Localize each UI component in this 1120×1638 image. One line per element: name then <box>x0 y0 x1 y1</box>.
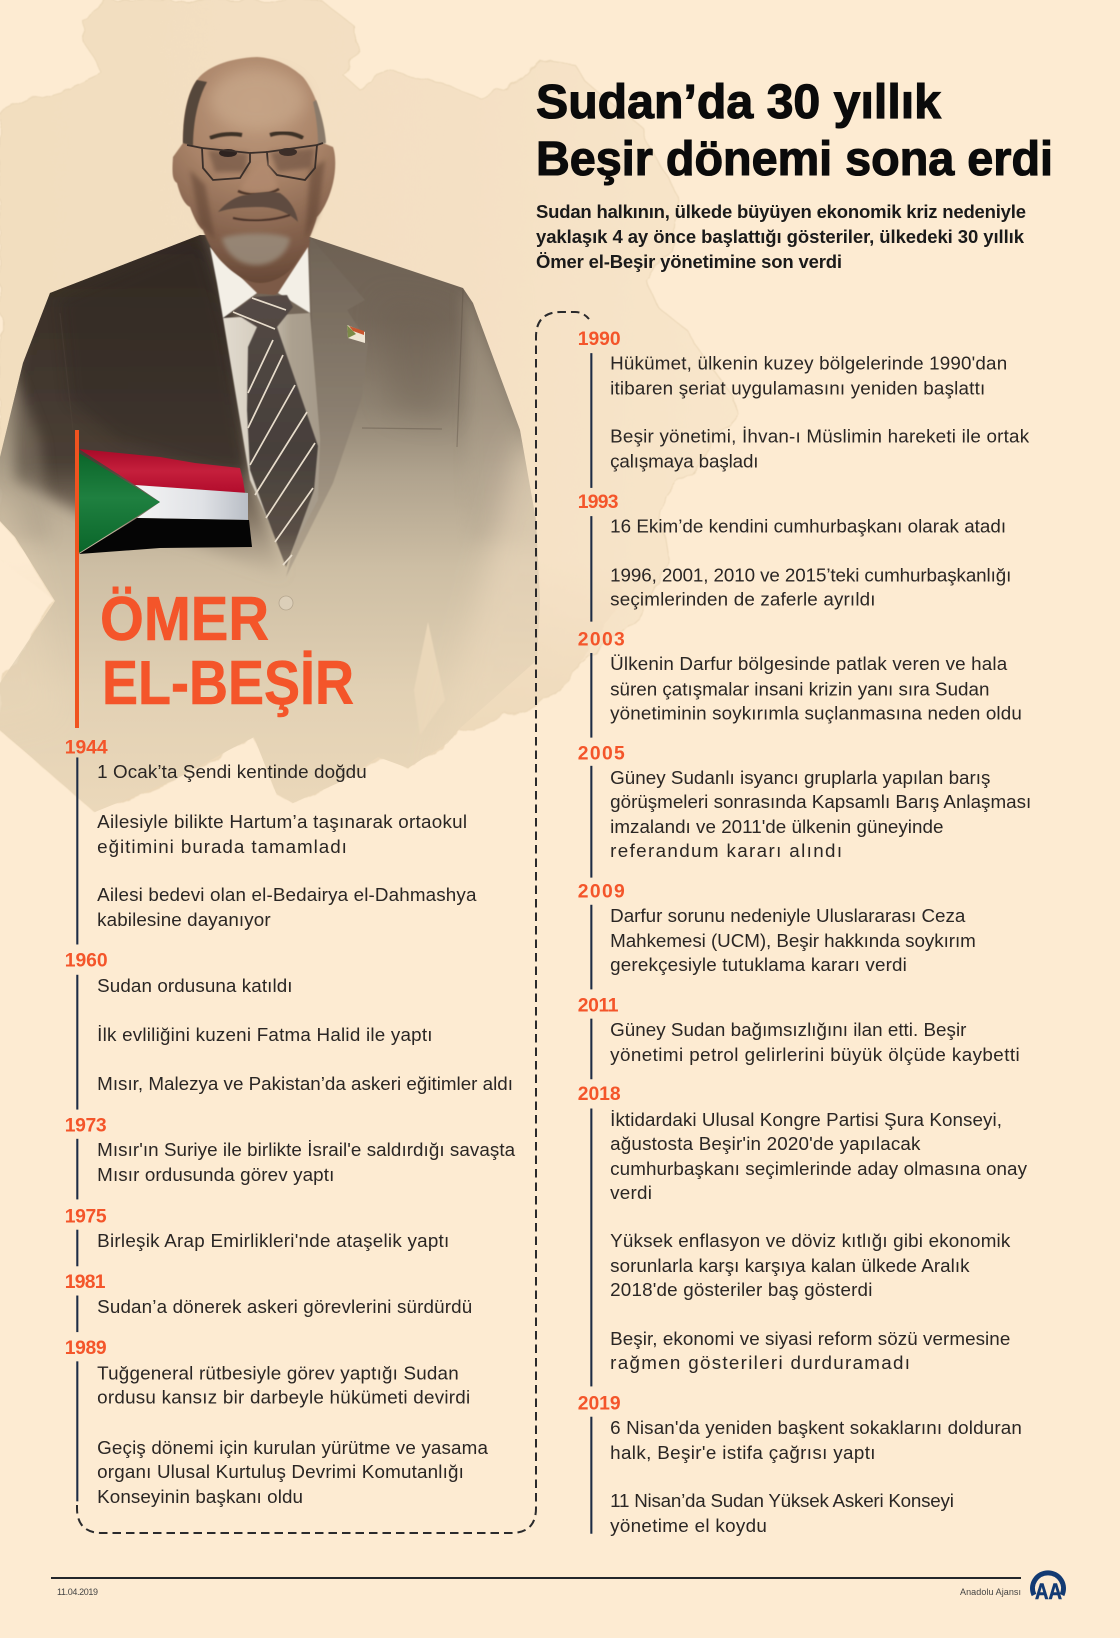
nose <box>240 160 278 193</box>
entry 1975: Birleşik Arap Emirlikleri'nde ataşelik yaptı <box>97 1230 449 1251</box>
entry 1990: Beşir yönetimi, İhvan-ı Müslimin hareketi ile ortak <box>610 425 1030 446</box>
entry 2009 <box>578 881 976 989</box>
jacket button <box>279 596 293 610</box>
entry 2018: 2018'de gösteriler baş gösterdi <box>610 1279 872 1300</box>
entry 1960 <box>65 950 513 1110</box>
entry 2005: imzalandı ve 2011'de ülkenin güneyinde <box>610 816 943 837</box>
entry 1990: çalışmaya başladı <box>610 451 759 472</box>
title: Beşir dönemi sona erdi <box>536 133 1053 186</box>
entry 2018: İktidardaki Ulusal Kongre Partisi Şura Konseyi, <box>610 1109 1002 1130</box>
entry 1989: organı Ulusal Kurtuluş Devrimi Komutanlığı <box>97 1461 464 1482</box>
head <box>172 57 335 283</box>
forehead highlight <box>210 70 306 130</box>
hair <box>183 80 207 146</box>
entry 2011 <box>578 995 1020 1079</box>
entry 1944: kabilesine dayanıyor <box>97 909 271 930</box>
entry 1973: 1973 <box>65 1115 107 1136</box>
entry 1960: İlk evliliğini kuzeni Fatma Halid ile yaptı <box>97 1024 433 1045</box>
subtitle: Ömer el-Beşir yönetimine son verdi <box>536 251 842 272</box>
entry 1990: Hükümet, ülkenin kuzey bölgelerinde 1990'dan <box>610 352 1007 373</box>
entry 2019 <box>578 1393 1022 1536</box>
lapel pin <box>347 325 365 343</box>
black stripe <box>79 518 252 554</box>
entry 1993: 16 Ekim’de kendini cumhurbaşkanı olarak atadı <box>610 515 1006 536</box>
entry 2019: yönetime el koydu <box>610 1515 767 1536</box>
entry 2011: yönetimi petrol gelirlerini büyük ölçüde kaybetti <box>610 1044 1020 1065</box>
subtitle <box>536 201 1026 272</box>
entry 1989: Tuğgeneral rütbesiyle görev yaptığı Sudan <box>97 1363 459 1384</box>
entry 2019: 2019 <box>578 1393 621 1414</box>
neck <box>210 240 310 295</box>
entry 2009: gerekçesiyle tutuklama kararı verdi <box>610 954 907 975</box>
entry 1944: 1944 <box>65 737 108 758</box>
eye sockets <box>208 148 315 172</box>
paper stain <box>0 0 737 812</box>
entry 1990: 1990 <box>578 329 621 350</box>
entry 2009: Darfur sorunu nedeniyle Uluslararası Ceza <box>610 905 966 926</box>
cheek shading <box>190 160 325 240</box>
entry 2005: görüşmeleri sonrasında Kapsamlı Barış Anlaşması <box>610 791 1031 812</box>
portrait photo <box>0 57 560 825</box>
red stripe <box>79 449 245 493</box>
jacket <box>0 215 560 825</box>
entry 1975: 1975 <box>65 1206 107 1227</box>
entry 2018: verdi <box>610 1182 652 1203</box>
left dark jacket panel <box>15 215 286 580</box>
entry 1975 <box>65 1206 449 1266</box>
entry 1990 <box>578 329 1030 488</box>
entry 1993: seçimlerinden de zaferle ayrıldı <box>610 588 876 609</box>
date: 11.04.2019 <box>57 1587 98 1597</box>
entry 1960: 1960 <box>65 950 108 971</box>
entry 2018 <box>578 1084 1028 1386</box>
white stripe <box>135 485 248 520</box>
moustache <box>218 192 298 222</box>
entry 1989: Geçiş dönemi için kurulan yürütme ve yasama <box>97 1437 488 1458</box>
name heading: EL-BEŞİR <box>102 649 354 718</box>
entry 1981: Sudan’a dönerek askeri görevlerini sürdürdü <box>97 1296 472 1317</box>
flag pole <box>75 430 79 728</box>
timeline: right column <box>578 329 1031 1536</box>
entry 1973: Mısır ordusunda görev yaptı <box>97 1164 334 1185</box>
right lapel <box>286 293 358 575</box>
entry 2003 <box>578 630 1022 738</box>
entry 1993 <box>578 492 1011 622</box>
entry 2018: rağmen gösterileri durduramadı <box>610 1352 910 1373</box>
entry 1960: Sudan ordusuna katıldı <box>97 975 293 996</box>
eyes <box>219 149 237 157</box>
timeline: left column <box>65 737 516 1507</box>
logo: Anadolu Agency: AA <box>1035 1579 1062 1604</box>
entry 2019: 6 Nisan'da yeniden başkent sokaklarını dolduran <box>610 1417 1022 1438</box>
glasses <box>187 143 323 180</box>
face <box>172 57 335 283</box>
eyebrows <box>210 133 303 138</box>
mouth <box>233 215 290 220</box>
dashed connector between timelines <box>77 312 589 1533</box>
necktie <box>233 295 318 567</box>
entry 2018: sorunlarla karşı karşıya kalan ülkede Aralık <box>610 1255 970 1276</box>
source: Anadolu Ajansı <box>960 1587 1021 1597</box>
entry 2005: referandum kararı alındı <box>610 840 842 861</box>
entry 2018: cumhurbaşkanı seçimlerinde aday olmasına onay <box>610 1158 1028 1179</box>
entry 2003: Ülkenin Darfur bölgesinde patlak veren ve hala <box>610 653 1008 674</box>
collar <box>210 247 310 318</box>
entry 2011: Güney Sudan bağımsızlığını ilan etti. Beşir <box>610 1019 966 1040</box>
entry 2003: 2003 <box>578 630 625 651</box>
entry 2019: halk, Beşir'e istifa çağrısı yaptı <box>610 1442 876 1463</box>
logo: Anadolu Agency <box>1032 1573 1064 1604</box>
entry 2009: 2009 <box>578 881 625 902</box>
entry 2018: 2018 <box>578 1084 621 1105</box>
name heading: ÖMER <box>100 585 269 654</box>
entry 1973: Mısır'ın Suriye ile birlikte İsrail'e saldırdığı savaşta <box>97 1139 516 1160</box>
entry 2003: yönetiminin soykırımla suçlanmasına neden oldu <box>610 702 1022 723</box>
entry 1944: 1 Ocak’ta Şendi kentinde doğdu <box>97 761 367 782</box>
entry 1944: Ailesiyle bilikte Hartum’a taşınarak ortaokul <box>97 811 467 832</box>
entry 1989: 1989 <box>65 1338 107 1359</box>
subtitle: Sudan halkının, ülkede büyüyen ekonomik kriz nedeniyle <box>536 201 1026 222</box>
name heading <box>100 585 354 718</box>
entry 2018: Yüksek enflasyon ve döviz kıtlığı gibi ekonomik <box>610 1230 1011 1251</box>
title: Sudan’da 30 yıllık <box>536 76 941 129</box>
entry 1944: eğitimini burada tamamladı <box>97 836 347 857</box>
entry 1944 <box>65 737 477 944</box>
entry 1944: Ailesi bedevi olan el-Bedairya el-Dahmashya <box>97 884 477 905</box>
entry 1993: 1993 <box>578 492 619 513</box>
entry 1989: ordusu kansız bir darbeyle hükümeti devirdi <box>97 1387 470 1408</box>
entry 2009: Mahkemesi (UCM), Beşir hakkında soykırım <box>610 930 976 951</box>
footer <box>51 1573 1064 1604</box>
entry 2005: Güney Sudanlı isyancı gruplarla yapılan barış <box>610 767 990 788</box>
entry 2005 <box>578 744 1031 878</box>
entry 1981: 1981 <box>65 1272 106 1293</box>
entry 1960: Mısır, Malezya ve Pakistan’da askeri eğitimler aldı <box>97 1073 513 1094</box>
entry 1989 <box>65 1338 488 1507</box>
flag of Sudan <box>79 449 252 554</box>
subtitle: yaklaşık 4 ay önce başlattığı gösteriler, ülkedeki 30 yıllık <box>536 226 1025 247</box>
green triangle <box>79 453 160 553</box>
shirt <box>223 313 320 560</box>
entry 2003: süren çatışmalar insani krizin yanı sıra Sudan <box>610 678 989 699</box>
entry 1981 <box>65 1272 472 1332</box>
entry 2011: 2011 <box>578 995 619 1016</box>
entry 1973 <box>65 1115 516 1199</box>
entry 2018: Beşir, ekonomi ve siyasi reform sözü vermesine <box>610 1328 1010 1349</box>
beard <box>222 234 290 265</box>
entry 2005: 2005 <box>578 744 625 765</box>
title <box>536 76 1053 186</box>
entry 1990: itibaren şeriat uygulamasını yeniden başlattı <box>610 377 985 398</box>
entry 1993: 1996, 2001, 2010 ve 2015’teki cumhurbaşkanlığı <box>610 564 1011 585</box>
entry 2019: 11 Nisan’da Sudan Yüksek Askeri Konseyi <box>610 1490 954 1511</box>
sleeve highlights <box>6 380 48 535</box>
entry 1989: Konseyinin başkanı oldu <box>97 1486 303 1507</box>
entry 2018: ağustosta Beşir'in 2020'de yapılacak <box>610 1133 921 1154</box>
